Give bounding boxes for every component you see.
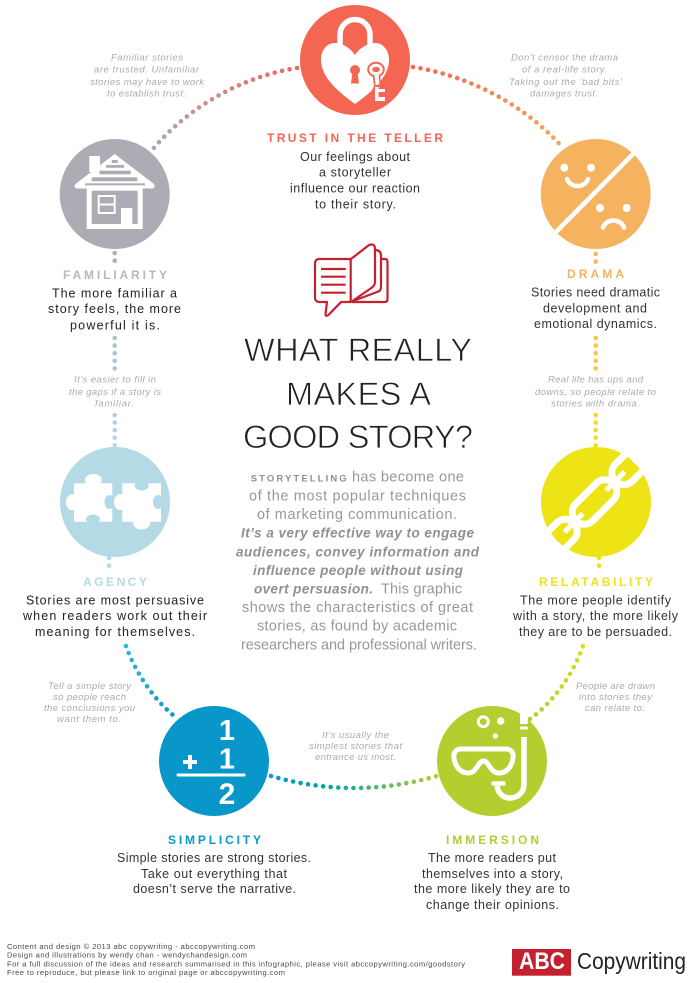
footer credits: For a full discussion of the ideas and research summarised in this infographic, please visit abccopywriting.com/goodstory <box>7 959 465 968</box>
footer credits: Content and design © 2013 abc copywriting - abccopywriting.com <box>7 942 255 951</box>
connector: trust to familiarity <box>153 68 297 149</box>
description <box>22 593 207 639</box>
description: with a story, the more likely <box>512 609 679 623</box>
icon: heart padlock and key <box>300 5 410 115</box>
note: drawn into stories: People are drawn <box>576 681 655 692</box>
description: Stories are most persuasive <box>26 593 204 607</box>
introduction paragraph <box>236 470 480 653</box>
description: Our feelings about <box>300 150 411 164</box>
note: censor the drama: of a real-life story. <box>522 65 607 76</box>
icon: snorkel mask <box>437 706 547 816</box>
description: they are to be persuaded. <box>519 625 672 639</box>
note: familiar stories: to establish trust. <box>107 89 186 100</box>
title: WHAT REALLY <box>244 332 472 368</box>
footer credits: Design and illustrations by wendy chan - wendychandesign.com <box>7 951 247 960</box>
description: emotional dynamics. <box>534 317 657 331</box>
description: change their opinions. <box>426 898 559 912</box>
connector: trust to drama <box>413 67 563 148</box>
note: fill in the gaps: familiar. <box>95 399 134 410</box>
introduction paragraph: shows the characteristics of great <box>242 600 473 616</box>
note: simple story: want them to. <box>57 714 121 725</box>
description: themselves into a story, <box>422 867 563 881</box>
icon: one plus one equals two: 1 <box>219 744 235 776</box>
description: to their story. <box>315 198 396 212</box>
icon: open book speech bubble <box>315 244 388 316</box>
heading: AGENCY <box>83 575 147 589</box>
panel: agency <box>22 447 207 639</box>
introduction paragraph: It’s a very effective way to engage <box>241 526 474 541</box>
note: simple story <box>44 681 136 725</box>
note: simplest stories: It’s usually the <box>322 730 389 741</box>
heading: SIMPLICITY <box>168 833 261 847</box>
note: fill in the gaps: the gaps if a story is <box>69 387 161 398</box>
description: a storyteller <box>319 166 391 180</box>
panel: drama <box>531 139 660 331</box>
note: censor the drama: Don’t censor the drama <box>511 53 618 64</box>
note: familiar stories: Familiar stories <box>111 53 183 64</box>
heading: FAMILIARITY <box>63 268 167 282</box>
note: drawn into stories: into stories they <box>579 692 653 703</box>
icon: house <box>60 139 170 249</box>
heading: TRUST IN THE TELLER <box>267 131 443 145</box>
note: ups and downs: stories with drama. <box>551 399 640 410</box>
note: censor the drama: Taking out the ‘bad bits’ <box>509 77 623 88</box>
description <box>414 851 570 912</box>
description: The more readers put <box>428 851 557 865</box>
description <box>48 286 181 332</box>
footer credits: Free to reproduce, but please link to original page or abccopywriting.com <box>7 968 285 977</box>
title: MAKES A <box>286 376 431 412</box>
introduction paragraph: has become one <box>352 470 464 486</box>
icon: one plus one equals two: 1 <box>219 715 235 747</box>
connector: immersion to relatability <box>530 558 599 719</box>
title: GOOD STORY? <box>243 419 473 455</box>
introduction paragraph: of the most popular techniques <box>249 488 466 504</box>
introduction paragraph: influence people without using <box>253 563 464 578</box>
note: familiar stories: are trusted. Unfamiliar <box>94 65 200 76</box>
introduction paragraph: overt persuasion. <box>254 581 373 596</box>
heading: RELATABILITY <box>539 575 653 589</box>
panel: trust in the teller <box>267 5 443 212</box>
note: censor the drama: damages trust. <box>530 89 598 100</box>
description: influence our reaction <box>290 182 420 196</box>
introduction paragraph: STORYTELLING <box>251 474 347 485</box>
description: The more familiar a <box>52 286 177 300</box>
description: Take out everything that <box>141 867 288 881</box>
description <box>512 593 679 639</box>
heading: IMMERSION <box>446 833 539 847</box>
note: drawn into stories: can relate to. <box>585 703 645 714</box>
note: simplest stories: entrance us most. <box>315 752 396 763</box>
introduction paragraph: researchers and professional writers. <box>241 637 477 653</box>
note: simple story: the conclusions you <box>44 703 136 714</box>
note: simple story: Tell a simple story <box>48 681 132 692</box>
note: fill in the gaps <box>69 375 161 410</box>
logo: ABC Copywriting: Copywriting <box>577 948 686 974</box>
title <box>243 332 473 455</box>
description: The more people identify <box>520 593 672 607</box>
connector: agency to simplicity <box>109 558 178 719</box>
introduction paragraph: This graphic <box>381 581 462 597</box>
note: censor the drama <box>509 53 623 100</box>
description <box>290 150 420 212</box>
note: familiar stories: stories may have to work <box>90 77 205 88</box>
footer credits <box>7 942 465 977</box>
description: Simple stories are strong stories. <box>117 851 311 865</box>
description <box>117 851 311 896</box>
introduction paragraph: of marketing communication. <box>257 507 457 523</box>
description: powerful it is. <box>70 318 160 332</box>
panel: familiarity <box>48 139 181 332</box>
description: doesn’t serve the narrative. <box>133 882 296 896</box>
icon: one plus one equals two <box>159 706 269 816</box>
description: meaning for themselves. <box>35 625 195 639</box>
note: simple story: so people reach <box>53 692 126 703</box>
description: development and <box>543 302 647 316</box>
icon: chain links <box>523 430 666 574</box>
logo: ABC Copywriting: ABC <box>519 948 565 975</box>
note: familiar stories <box>90 53 205 100</box>
icon: one plus one equals two: 2 <box>219 778 235 811</box>
note: simplest stories <box>309 730 402 763</box>
note: drawn into stories <box>576 681 655 714</box>
icon: puzzle pieces <box>60 447 170 557</box>
introduction paragraph: audiences, convey information and <box>236 544 480 559</box>
description <box>531 286 660 331</box>
connector: simplicity to immersion <box>271 776 437 788</box>
description: when readers work out their <box>22 609 207 623</box>
introduction paragraph: stories, as found by academic <box>257 619 457 635</box>
note: ups and downs: Real life has ups and <box>548 375 644 386</box>
panel: immersion <box>414 706 570 912</box>
panel: relatability <box>512 430 679 639</box>
description: the more likely they are to <box>414 882 570 896</box>
note: ups and downs <box>535 375 656 410</box>
description: Stories need dramatic <box>531 286 660 300</box>
connector: familiarity to agency <box>112 253 117 447</box>
heading: DRAMA <box>567 267 624 281</box>
icon: happy and sad faces <box>541 139 651 249</box>
panel: simplicity <box>117 706 311 896</box>
description: story feels, the more <box>48 302 181 316</box>
logo: ABC Copywriting <box>512 948 686 976</box>
note: ups and downs: downs, so people relate to <box>535 387 656 398</box>
note: simplest stories: simplest stories that <box>309 741 402 752</box>
connector: drama to relatability <box>593 254 598 447</box>
note: fill in the gaps: It’s easier to fill in <box>74 375 156 386</box>
